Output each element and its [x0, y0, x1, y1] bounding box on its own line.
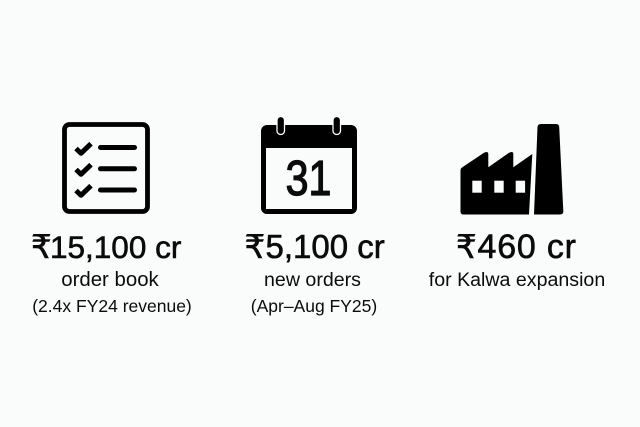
note: period: (Apr–Aug FY25)	[251, 296, 377, 316]
metric: new orders value: ₹	[244, 229, 265, 265]
calendar date: 31	[286, 151, 331, 206]
label: Kalwa expansion: for Kalwa expansion	[429, 269, 605, 291]
label: order book: order book	[61, 269, 160, 291]
metric: new orders value: 5,100 cr	[266, 228, 385, 265]
icon: checklist	[64, 124, 148, 212]
metric: expansion value: ₹	[456, 229, 477, 265]
label: new orders: new orders	[264, 269, 361, 291]
metric: order book value: 15,100 cr	[50, 229, 181, 265]
panel: order book	[31, 124, 192, 316]
note: revenue multiple: (2.4x FY24 revenue)	[32, 296, 192, 316]
panel: new orders	[244, 116, 385, 316]
icon: factory	[460, 124, 563, 214]
metric: order book value: ₹	[31, 229, 52, 265]
panel: Kalwa expansion	[429, 124, 605, 291]
metric: expansion value: 460 cr	[478, 228, 577, 266]
icon: calendar	[261, 116, 357, 214]
